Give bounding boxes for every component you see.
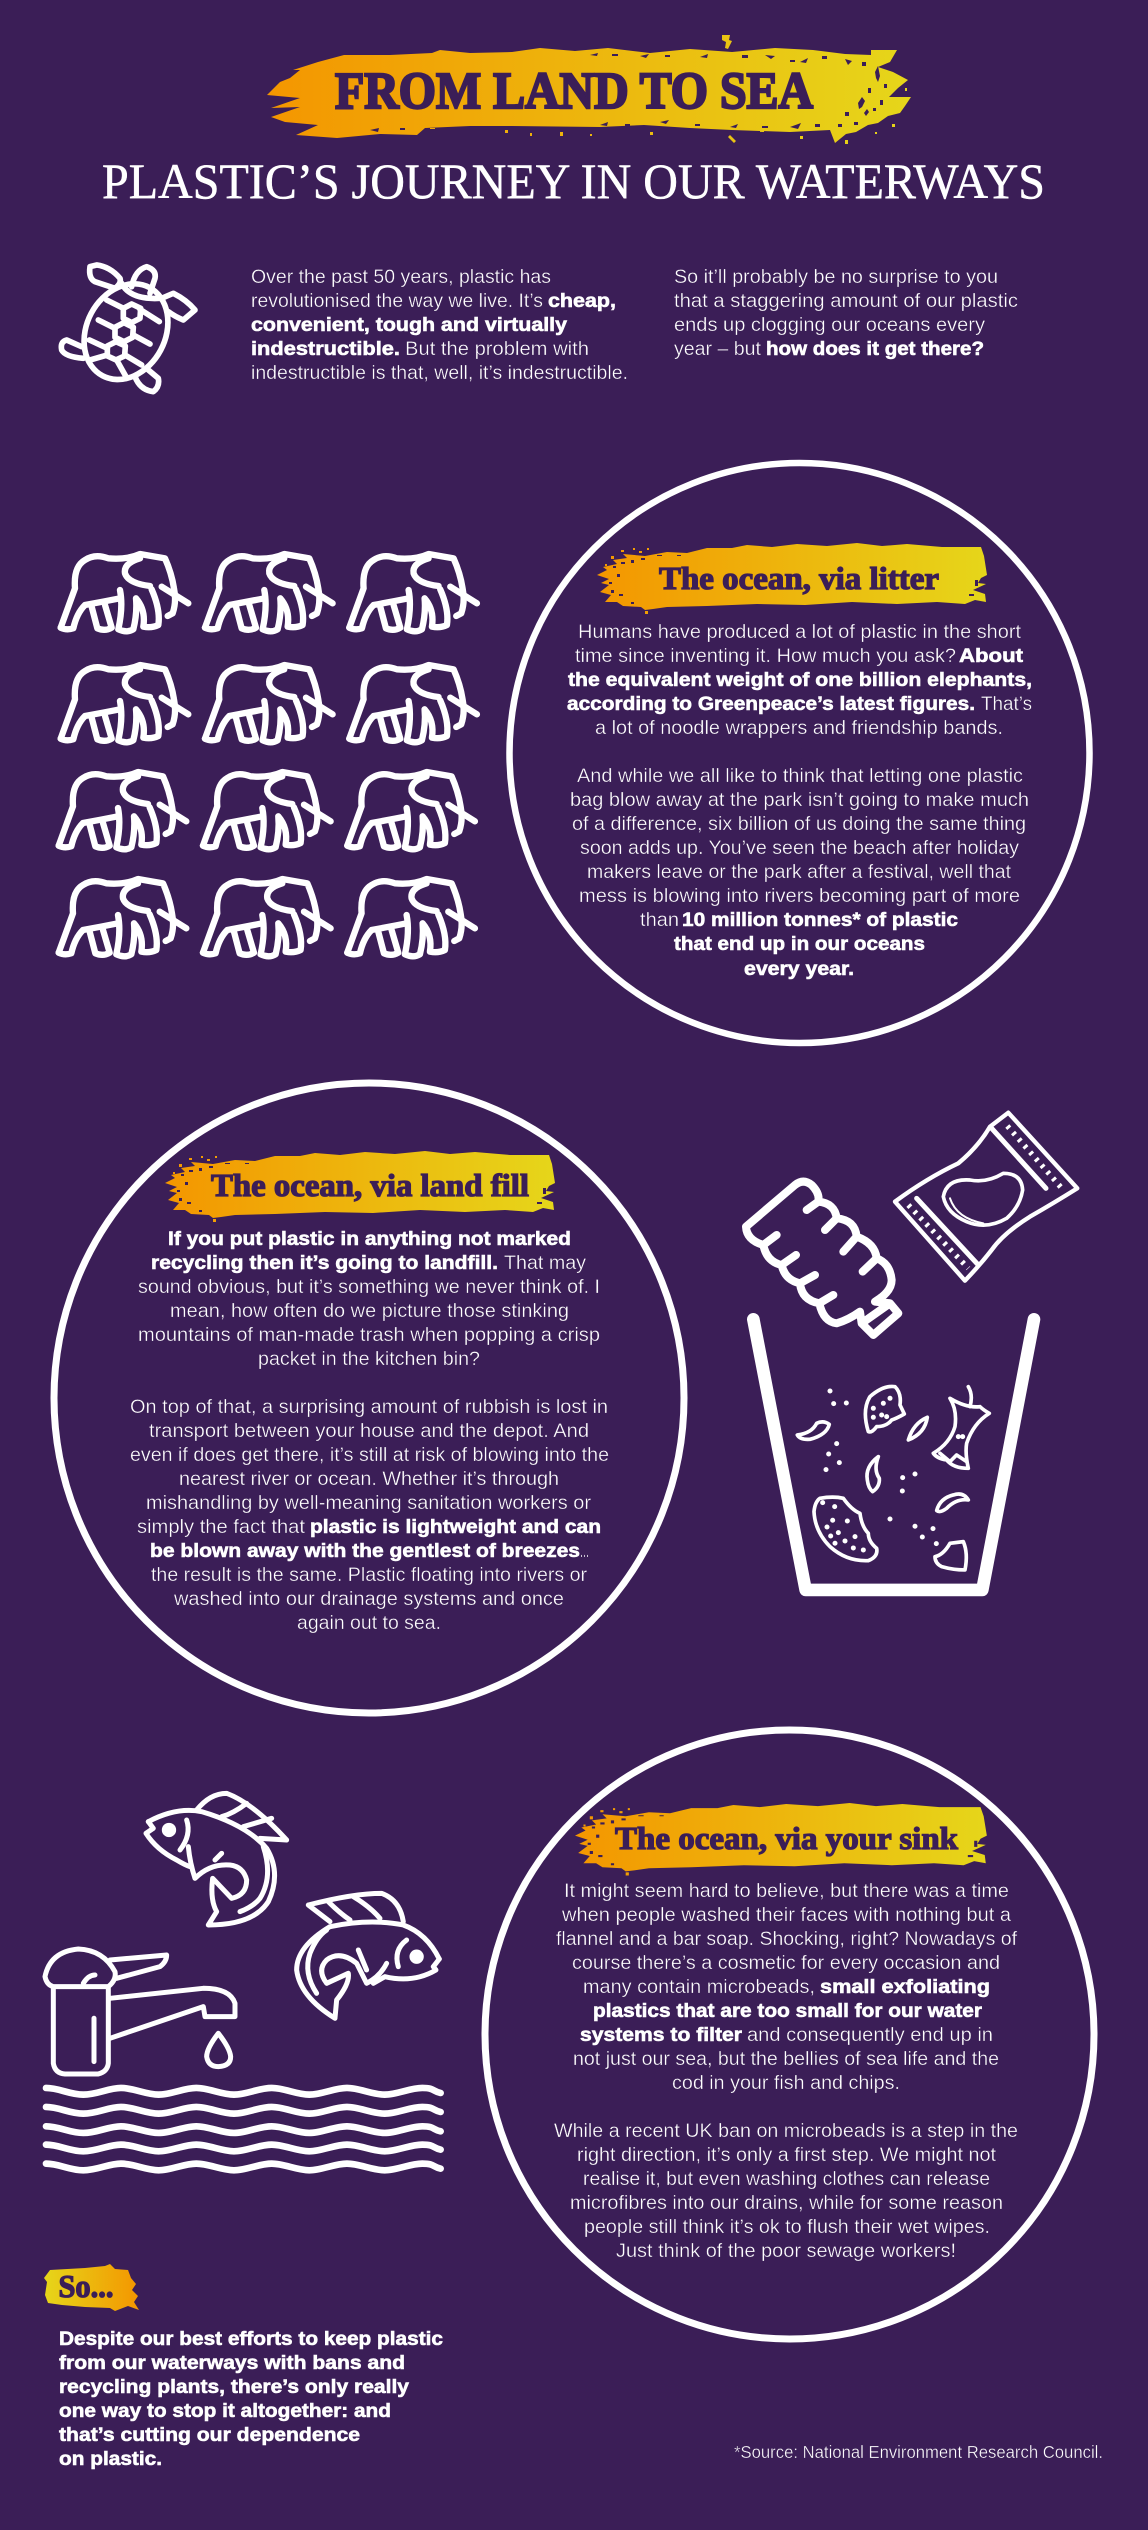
- intro text: column one: revolutionised the way we live. It’s: [251, 290, 543, 312]
- closing statement: on plastic.: [59, 2448, 162, 2470]
- paragraph two: than: [640, 909, 679, 931]
- subtitle: PLASTIC’S JOURNEY IN OUR WATERWAYS: [102, 153, 1045, 209]
- paragraph two: soon adds up. You’ve seen the beach after holiday: [580, 837, 1019, 859]
- brush flecks: [370, 53, 887, 132]
- paragraph one: when people washed their faces with nothing but a: [561, 1904, 1011, 1926]
- icon: plastic bottle: [746, 1182, 898, 1335]
- paragraph one: recycling then it’s going to landfill.: [151, 1252, 498, 1274]
- paragraph one: [138, 1228, 600, 1370]
- intro text: column one: Over the past 50 years, plastic has: [251, 266, 551, 288]
- paragraph one: many contain microbeads,: [583, 1976, 815, 1998]
- source note: *Source: National Environment Research Council.: [734, 2442, 1103, 2462]
- paragraph two: nearest river or ocean. Whether it’s through: [179, 1468, 559, 1490]
- paragraph two: that end up in our oceans: [674, 933, 925, 955]
- paragraph one: small exfoliating: [820, 1976, 990, 1998]
- paragraph two: And while we all like to think that letting one plastic: [577, 765, 1023, 787]
- paragraph two: microfibres into our drains, while for some reason: [570, 2192, 1003, 2214]
- icon: elephant: [205, 554, 333, 631]
- conclusion: So...: [44, 2264, 443, 2470]
- heading: The ocean, via land fill: [211, 1167, 529, 1203]
- paragraph one: course there’s a cosmetic for every occasion and: [572, 1952, 1000, 1974]
- icon: elephant: [59, 772, 186, 849]
- intro text: column two: ends up clogging our oceans every: [674, 314, 985, 336]
- intro text: column two: year – but: [674, 338, 762, 360]
- closing statement: Despite our best efforts to keep plastic: [59, 2328, 443, 2350]
- paragraph two: realise it, but even washing clothes can release: [583, 2168, 990, 2190]
- paragraph one: It might seem hard to believe, but there was a time: [564, 1880, 1009, 1902]
- icon: elephant: [349, 665, 477, 742]
- icon: crisp packet: [895, 1113, 1077, 1281]
- intro text: column one: indestructible is that, well, it’s indestructible.: [251, 362, 628, 384]
- icon: turtle: [61, 265, 195, 394]
- icon group: twelve elephants: [59, 554, 477, 956]
- paragraph two: the result is the same. Plastic floating into rivers or: [151, 1564, 587, 1586]
- heading: So...: [58, 2268, 114, 2304]
- icon: tap: [45, 1949, 235, 2074]
- paragraph one: If you put plastic in anything not marked: [168, 1228, 571, 1250]
- brush stroke: [597, 543, 987, 614]
- intro text: column one: [251, 266, 628, 384]
- icon: elephant: [203, 879, 331, 956]
- brush stroke: [44, 2264, 139, 2311]
- icon: crisp packet and bottle falling into bin: [746, 1113, 1077, 1590]
- intro text: column two: So it’ll probably be no surprise to you: [674, 266, 998, 288]
- intro text: column one: convenient, tough and virtually: [251, 314, 567, 336]
- icon: elephant: [205, 665, 333, 742]
- icon: elephant: [347, 879, 475, 956]
- paragraph two: 10 million tonnes* of plastic: [682, 909, 958, 931]
- paragraph one: [556, 1880, 1018, 2094]
- icon: elephant: [61, 665, 188, 742]
- intro text: column one: cheap,: [548, 290, 616, 312]
- paragraph one: a lot of noodle wrappers and friendship bands.: [595, 717, 1003, 739]
- paragraph one: the equivalent weight of one billion elephants,: [568, 669, 1032, 691]
- paragraph two: even if does get there, it’s still at risk of blowing into the: [130, 1444, 609, 1466]
- paragraph two: Just think of the poor sewage workers!: [616, 2240, 956, 2262]
- paragraph two: [130, 1396, 609, 1634]
- icon: elephant: [347, 772, 475, 849]
- paint brush stroke: [267, 35, 911, 144]
- heading text: FROM LAND TO SEA: [335, 63, 813, 120]
- closing statement: recycling plants, there’s only really: [59, 2376, 409, 2398]
- paragraph one: time since inventing it. How much you ask?: [575, 645, 956, 667]
- icon: fish two: [297, 1893, 439, 2018]
- paragraph two: plastic is lightweight and can: [310, 1516, 601, 1538]
- paragraph two: mess is blowing into rivers becoming part of more: [579, 885, 1020, 907]
- circle outline: [54, 1083, 684, 1713]
- paragraph two: be blown away with the gentlest of breezes: [150, 1540, 580, 1562]
- paragraph two: again out to sea.: [297, 1612, 441, 1634]
- intro text: column one: But the problem with: [405, 338, 589, 360]
- title banner: From Land to Sea: [267, 35, 911, 144]
- paragraph one: packet in the kitchen bin?: [258, 1348, 480, 1370]
- paragraph one: according to Greenpeace’s latest figures.: [567, 693, 975, 715]
- closing statement: that’s cutting our dependence: [59, 2424, 360, 2446]
- paragraph one: [567, 621, 1032, 739]
- paragraph two: right direction, it’s only a first step. We might not: [577, 2144, 997, 2166]
- intro text: column two: that a staggering amount of our plastic: [674, 290, 1018, 312]
- icon: elephant: [349, 554, 477, 631]
- paragraph one: not just our sea, but the bellies of sea life and the: [573, 2048, 999, 2070]
- paragraph two: every year.: [744, 958, 854, 980]
- paragraph two: ...: [580, 1540, 589, 1562]
- icon: water drop: [207, 2033, 231, 2067]
- paragraph two: simply the fact that: [137, 1516, 306, 1538]
- paragraph two: [570, 765, 1029, 980]
- icon: elephant: [203, 772, 331, 849]
- paragraph one: plastics that are too small for our water: [593, 2000, 982, 2022]
- paragraph two: transport between your house and the depot. And: [149, 1420, 589, 1442]
- icon: elephant: [59, 879, 186, 956]
- intro text: column two: how does it get there?: [766, 338, 984, 360]
- paragraph one: mean, how often do we picture those stinking: [170, 1300, 569, 1322]
- paragraph one: systems to filter: [580, 2024, 742, 2046]
- paragraph two: While a recent UK ban on microbeads is a step in the: [554, 2120, 1018, 2142]
- paragraph one: Humans have produced a lot of plastic in the short: [578, 621, 1022, 643]
- intro text: column two: [674, 266, 1018, 360]
- panel: the ocean via litter: [510, 463, 1090, 1043]
- closing statement: [59, 2328, 443, 2470]
- bin contents: crumbs: [823, 1391, 963, 1550]
- heading: The ocean, via your sink: [615, 1820, 958, 1856]
- paragraph one: and consequently end up in: [747, 2024, 993, 2046]
- paragraph one: About: [959, 645, 1024, 667]
- paragraph two: people still think it’s ok to flush their wet wipes.: [584, 2216, 990, 2238]
- paragraph two: makers leave or the park after a festival, well that: [587, 861, 1012, 883]
- icon: elephant: [61, 554, 188, 631]
- paragraph one: That may: [504, 1252, 586, 1274]
- paragraph one: That’s: [981, 693, 1032, 715]
- icon: waves: [46, 2088, 441, 2170]
- circle outline: [485, 1730, 1094, 2339]
- icon: bin: [753, 1319, 1034, 1590]
- panel: the ocean via land fill: [54, 1083, 684, 1713]
- paragraph two: of a difference, six billion of us doing the same thing: [572, 813, 1026, 835]
- panel: the ocean via your sink: [485, 1730, 1094, 2339]
- paragraph one: sound obvious, but it’s something we never think of. I: [138, 1276, 600, 1298]
- brush stroke: [165, 1151, 555, 1222]
- paragraph two: washed into our drainage systems and once: [173, 1588, 564, 1610]
- paragraph one: cod in your fish and chips.: [672, 2072, 900, 2094]
- paragraph two: [554, 2120, 1018, 2262]
- paragraph two: bag blow away at the park isn’t going to make much: [570, 789, 1029, 811]
- paragraph two: mishandling by well-meaning sanitation workers or: [146, 1492, 592, 1514]
- closing statement: from our waterways with bans and: [59, 2352, 405, 2374]
- closing statement: one way to stop it altogether: and: [59, 2400, 391, 2422]
- intro text: column one: indestructible.: [251, 338, 400, 360]
- paragraph two: On top of that, a surprising amount of rubbish is lost in: [130, 1396, 608, 1418]
- icon: fish and dripping tap over waves: [45, 1793, 441, 2170]
- circle outline: [510, 463, 1090, 1043]
- heading: The ocean, via litter: [659, 560, 939, 596]
- paragraph one: flannel and a bar soap. Shocking, right? Nowadays of: [556, 1928, 1018, 1950]
- brush stroke: [575, 1803, 987, 1875]
- bin contents: food scraps: [797, 1386, 989, 1570]
- icon: fish one: [146, 1793, 287, 1925]
- paragraph one: mountains of man-made trash when popping a crisp: [138, 1324, 600, 1346]
